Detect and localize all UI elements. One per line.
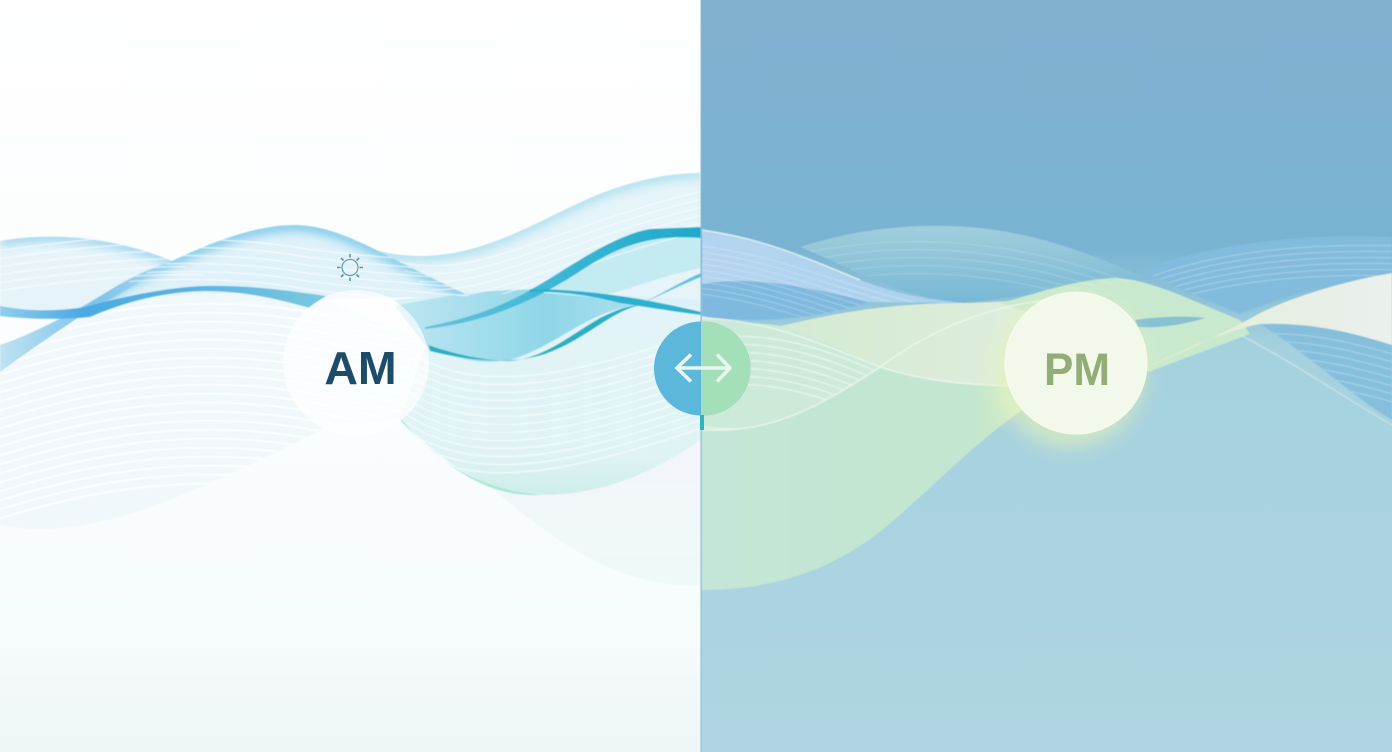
wave: large pale band — [0, 290, 420, 529]
ribbon: teal lower strand — [428, 305, 640, 361]
wave: pale backing behind strands — [395, 270, 701, 350]
PM label: PM — [1044, 344, 1110, 395]
ribbon: upper teal strand — [530, 289, 701, 315]
right wave group: evening ribbons — [700, 226, 1392, 590]
wave: lavender lower veil — [440, 440, 701, 585]
wave: blue sliver — [1135, 317, 1205, 327]
wave: cream right ribbon — [1148, 273, 1392, 366]
wave: upper right blue band — [1140, 236, 1392, 314]
PM badge — [1005, 292, 1147, 434]
wave: light blue lens — [702, 230, 965, 320]
wave: teal lower band — [400, 305, 701, 495]
bright edge strokes: right ribbons — [702, 230, 1392, 430]
wave: cream central band — [780, 298, 1050, 386]
wave: right pale green hump — [1000, 278, 1250, 372]
wave: upper right band — [375, 173, 701, 300]
ribbon: short right strand — [640, 273, 701, 304]
wave: big green veil — [702, 367, 1040, 590]
icon: sun — [337, 254, 363, 281]
wave: upper teal band — [800, 226, 1150, 303]
teal tick under badge — [700, 415, 704, 430]
wave: upper left lens — [0, 237, 250, 314]
wave: rising teal body — [530, 228, 701, 297]
wave: pale lined lens — [702, 316, 880, 430]
left wave group: morning ribbons — [0, 173, 720, 585]
divider: central line — [700, 0, 702, 752]
glow: pale halo around PM — [994, 296, 1146, 448]
AM badge — [283, 290, 429, 436]
right panel: evening background — [701, 0, 1392, 752]
wave: central crest — [107, 224, 465, 302]
left panel: morning background — [0, 0, 701, 752]
AM label: AM — [324, 342, 397, 394]
fine line texture: right — [702, 246, 916, 318]
ribbon: blue strand left — [0, 286, 326, 319]
wave: lower right blue lens — [1260, 324, 1392, 420]
ribbon: teal lower edge — [400, 417, 540, 495]
fine line texture: left — [0, 238, 470, 298]
wave: middle teal body — [395, 290, 701, 362]
icon: double arrow — [677, 354, 730, 382]
ribbon: teal crossing strand — [425, 227, 701, 329]
wave: left rising band — [0, 262, 170, 372]
transition badge with double arrow — [654, 322, 750, 430]
wave: deeper blue inner lens — [702, 281, 870, 320]
